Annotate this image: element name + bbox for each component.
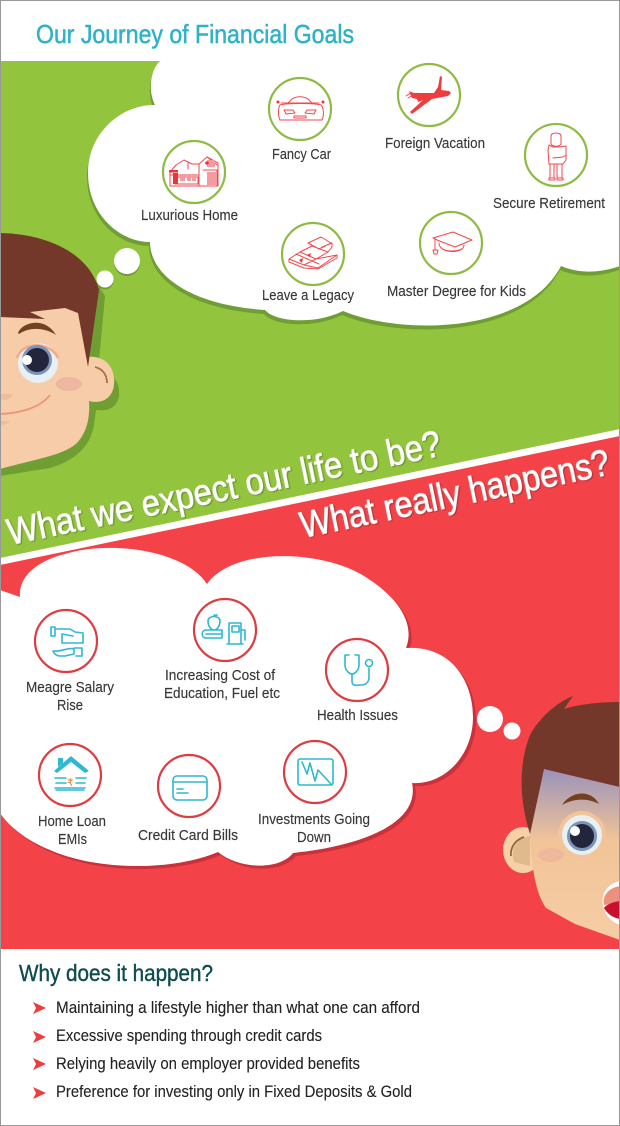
label: credit card: Credit Card Bills [138, 827, 238, 844]
label: fancy car: Fancy Car [272, 146, 331, 163]
goal: master degree [420, 212, 482, 274]
goal: leave a legacy [282, 223, 344, 285]
label: master degree: Master Degree for Kids [387, 283, 526, 300]
panel: why it happens [0, 949, 620, 1126]
goal: luxurious home [163, 141, 225, 203]
bullet 2: Excessive spending through credit cards [56, 1027, 322, 1045]
problem: credit card [158, 755, 220, 817]
problem: investments down [284, 741, 346, 803]
label: investments: Down [297, 829, 331, 846]
problem: cost of education and fuel [194, 599, 256, 661]
label: health issues: Health Issues [317, 707, 398, 724]
label: investments [258, 811, 370, 846]
thought cloud: goals [87, 61, 620, 330]
label: secure retirement: Secure Retirement [493, 195, 606, 212]
panel: reality [0, 429, 620, 949]
label: meagre salary [26, 679, 114, 714]
goal: secure retirement [525, 124, 587, 186]
problem: health issues [326, 639, 388, 701]
bullet 1: Maintaining a lifestyle higher than what one can afford [56, 999, 420, 1017]
label: home loan: Home Loan [38, 813, 106, 830]
diagonal divider [0, 429, 620, 565]
heading: why: Why does it happen? [19, 960, 213, 986]
title: Our Journey of Financial Goals [36, 19, 354, 49]
label: meagre salary: Meagre Salary [26, 679, 114, 696]
label: increasing cost [164, 667, 280, 702]
label: luxurious home: Luxurious Home [141, 207, 238, 224]
label: meagre salary: Rise [57, 697, 83, 714]
thought bubbles: top [96, 248, 140, 290]
bullet 4: Preference for investing only in Fixed Deposits & Gold [56, 1083, 412, 1101]
goal: foreign vacation [398, 64, 460, 126]
thought bubbles: bottom [477, 706, 520, 740]
label: home loan: EMIs [58, 831, 87, 848]
label: home loan [38, 813, 106, 848]
bullet 3: Relying heavily on employer provided benefits [56, 1055, 360, 1073]
label: increasing cost: Increasing Cost of [165, 667, 276, 684]
character: worried boy [503, 696, 620, 940]
character: happy boy [0, 233, 119, 476]
goal: fancy car [269, 78, 331, 140]
panel: expectations [0, 61, 620, 562]
problem: home loan: ₹ [67, 778, 73, 789]
label: investments: Investments Going [258, 811, 370, 828]
thought cloud: problems [0, 548, 476, 869]
problem: home loan [39, 744, 101, 806]
label: leave a legacy: Leave a Legacy [262, 287, 354, 304]
label: increasing cost: Education, Fuel etc [164, 685, 280, 702]
problem: meagre salary [35, 610, 97, 672]
heading: what we expect: What we expect our life to be? [3, 423, 444, 553]
label: foreign vacation: Foreign Vacation [385, 135, 485, 152]
